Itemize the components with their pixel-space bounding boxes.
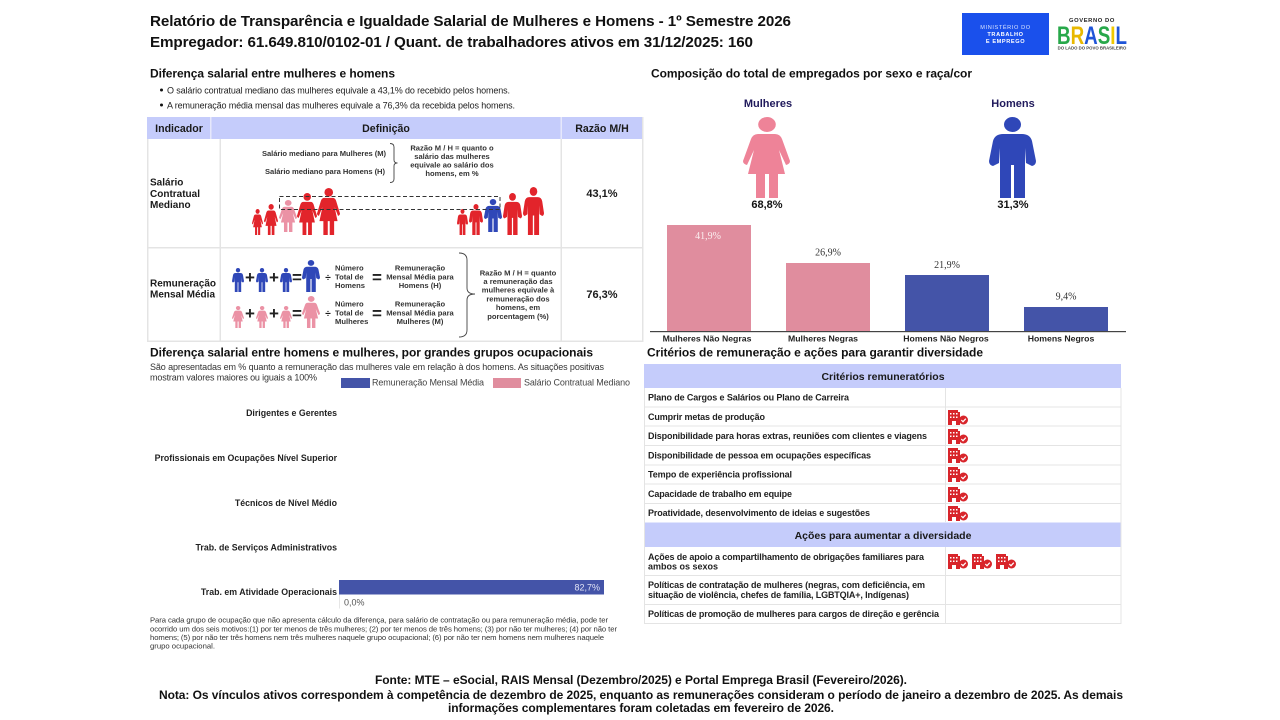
heading: grupos ocupacionais: Diferença salarial entre homens e mulheres, por grandes grupos ocupacionais <box>150 346 593 360</box>
row: remuneração mensal média: mulheres equivale à <box>482 286 555 294</box>
formula: homens: Remuneração <box>395 264 445 272</box>
title: Empregador: 61.649.810/0102-01 / Quant. de trabalhadores ativos em 31/12/2025: 160 <box>150 34 753 51</box>
icon: homens: 31,3% <box>997 199 1029 211</box>
panel: critérios table <box>644 364 1122 624</box>
text: fonte e nota <box>159 673 1123 715</box>
heading: composição: Composição do total de empregados por sexo e raça/cor <box>651 66 972 80</box>
text: footnote: grupo ocupacional. <box>150 642 215 650</box>
bar chart: grupos ocupacionais: Trab. em Atividade Operacionais <box>201 587 337 597</box>
title: Relatório de Transparência e Igualdade Salarial de Mulheres e Homens - 1º Semestre 2026 <box>150 13 791 30</box>
row: salário contratual mediano <box>150 144 618 211</box>
panel: indicator table <box>147 117 644 342</box>
rows: critérios: Disponibilidade de pessoa em ocupações específicas <box>648 450 871 460</box>
bullets: key findings <box>160 86 515 110</box>
formula: homens: + <box>245 268 255 287</box>
bar chart: sexo e raça/cor: 26,9% <box>815 248 841 258</box>
formula: mulheres <box>232 296 455 328</box>
heading: critérios: Critérios de remuneração e ações para garantir diversidade <box>647 346 983 360</box>
table header: Indicador <box>155 123 203 135</box>
bar chart: sexo e raça/cor <box>650 225 1126 344</box>
table header: Definição <box>362 123 410 135</box>
row: remuneração mensal média: remuneração dos <box>486 294 550 304</box>
formula: homens: Total de <box>335 272 364 282</box>
header: ações para aumentar a diversidade: Ações para aumentar a diversidade <box>795 530 972 542</box>
formula: homens: = <box>292 268 302 287</box>
row: salário contratual mediano: Razão M / H = quanto o <box>410 144 494 152</box>
bar chart: grupos ocupacionais: 82,7% <box>574 582 600 592</box>
formula: mulheres: Total de <box>335 308 364 318</box>
formula: mulheres: + <box>269 304 279 323</box>
row: salário contratual mediano: equivale ao salário dos <box>410 160 494 170</box>
logo: Ministério do Trabalho e Emprego: TRABALHO <box>987 32 1024 38</box>
row: salário contratual mediano: 43,1% <box>586 188 618 200</box>
icon: mulheres: Mulheres <box>744 98 792 110</box>
formula: mulheres: Mensal Média para <box>386 308 455 318</box>
row: salário contratual mediano: Salário <box>150 178 183 188</box>
formula: homens: Homens <box>335 281 365 290</box>
formula: homens: Número <box>335 264 364 272</box>
bar chart: sexo e raça/cor: Homens Não Negros <box>903 334 989 344</box>
legend: Remuneração Mensal Média <box>372 378 484 388</box>
rows: ações: situação de violência, chefes de família, LGBTQIA+, Indígenas) <box>648 590 909 600</box>
row: remuneração mensal média: Mensal Média <box>150 290 215 300</box>
bar chart: grupos ocupacionais: 0,0% <box>344 598 365 608</box>
icon: homens: Homens <box>991 98 1035 110</box>
rows: critérios: Capacidade de trabalho em equipe <box>648 489 792 499</box>
row: salário contratual mediano: Salário mediano para Mulheres (M) <box>262 149 386 158</box>
logo: Governo do Brasil: DO LADO DO POVO BRASILEIRO <box>1058 46 1127 50</box>
heading: diferença salarial: Diferença salarial entre mulheres e homens <box>150 66 395 80</box>
icons: mediana figures <box>252 187 544 235</box>
rows: critérios: Proatividade, desenvolvimento de ideias e sugestões <box>648 508 870 518</box>
formula: mulheres: Remuneração <box>395 300 445 308</box>
text: fonte e nota: informações complementares foram coletadas em fevereiro de 2026. <box>448 701 834 715</box>
text: footnote: homens; (5) por não ter três homens nem três mulheres naquele grupo ocupacional; (6) por não ter nem homens nem mulheres naquele <box>150 633 604 642</box>
text: footnote <box>150 616 617 650</box>
formula: homens: Homens (H) <box>399 281 442 290</box>
rows: ações: Políticas de promoção de mulheres para cargos de direção e gerência <box>648 609 940 619</box>
row: salário contratual mediano: Mediano <box>150 200 191 211</box>
formula: mulheres: + <box>245 304 255 323</box>
rows: ações: ambos os sexos <box>648 562 718 572</box>
logo: Ministério do Trabalho e Emprego: E EMPREGO <box>986 39 1025 45</box>
formula: homens: + <box>269 268 279 287</box>
text: chart description <box>150 362 604 382</box>
text: footnote: ocorrido um dos seis motivos:(1) por ter menos de três mulheres; (2) por ter menos de três homens; (3) por não ter mulheres; (4) por não ter <box>150 624 617 634</box>
row: remuneração mensal média: a remuneração das <box>483 277 553 286</box>
bar chart: grupos ocupacionais: Profissionais em Ocupações Nível Superior <box>155 453 338 463</box>
row: remuneração mensal média: porcentagem (%) <box>487 312 549 321</box>
row: remuneração mensal média: Razão M / H = quanto <box>480 268 557 278</box>
bar chart: grupos ocupacionais: Dirigentes e Gerentes <box>246 408 337 418</box>
rows: critérios: Tempo de experiência profissional <box>648 470 792 480</box>
icon: homens <box>989 98 1036 211</box>
rows: ações: Políticas de contratação de mulheres (negras, com deficiência, em <box>648 580 925 590</box>
rows: ações <box>648 552 940 619</box>
header: critérios remuneratórios: Critérios remuneratórios <box>821 371 945 383</box>
logo: Ministério do Trabalho e Emprego <box>962 13 1049 55</box>
icon: mulheres <box>743 98 792 211</box>
bar chart: sexo e raça/cor: Mulheres Negras <box>788 334 858 344</box>
bullets: key findings: O salário contratual mediano das mulheres equivale a 43,1% do recebido pelos homens. <box>167 86 510 96</box>
icons: critérios adotados <box>948 410 968 521</box>
text: fonte e nota: Nota: Os vínculos ativos correspondem à competência de dezembro de 2025, enquanto as remunerações consideram o período de janeiro a dezembro de 2025. As demais <box>159 688 1123 702</box>
rows: critérios: Disponibilidade para horas extras, reuniões com clientes e viagens <box>648 431 927 441</box>
row: remuneração mensal média: 76,3% <box>586 289 618 301</box>
legend <box>341 378 630 388</box>
logo: Governo do Brasil: GOVERNO DO <box>1069 18 1115 24</box>
icon: mulheres: 68,8% <box>751 199 783 211</box>
formula: homens: Mensal Média para <box>386 272 455 282</box>
logo: Ministério do Trabalho e Emprego: MINISTÉRIO DO <box>980 24 1031 31</box>
formula: mulheres: Mulheres <box>335 317 368 326</box>
formula: homens: = <box>372 268 382 287</box>
header: critérios remuneratórios <box>644 364 1121 388</box>
bar chart: sexo e raça/cor: 9,4% <box>1056 292 1076 302</box>
formula: homens: ÷ <box>325 273 331 284</box>
row: remuneração mensal média: Remuneração <box>150 278 216 290</box>
rows: critérios: Cumprir metas de produção <box>648 412 766 422</box>
header: ações para aumentar a diversidade <box>644 522 1121 547</box>
rows: critérios: Plano de Cargos e Salários ou Plano de Carreira <box>648 392 850 402</box>
bullets: key findings: A remuneração média mensal das mulheres equivale a 76,3% da recebida pelos homens. <box>167 100 515 110</box>
row: remuneração mensal média: homens, em <box>496 303 540 312</box>
bar chart: grupos ocupacionais: Trab. de Serviços Administrativos <box>196 542 337 552</box>
title <box>150 13 791 51</box>
legend: Salário Contratual Mediano <box>524 378 630 388</box>
bar chart: sexo e raça/cor: Homens Negros <box>1028 334 1094 344</box>
bar chart: grupos ocupacionais: Técnicos de Nível Médio <box>235 498 338 508</box>
formula: homens <box>232 260 455 292</box>
rows: ações: Ações de apoio a compartilhamento de obrigações familiares para <box>648 552 925 562</box>
formula: mulheres: ÷ <box>325 309 331 320</box>
text: chart description: mostram valores maiores ou iguais a 100% <box>150 372 317 382</box>
rows: critérios <box>648 392 927 518</box>
row: salário contratual mediano: Contratual <box>150 189 200 200</box>
formula: mulheres: Mulheres (M) <box>397 317 444 326</box>
bar chart: grupos ocupacionais <box>155 408 604 608</box>
icons: ações adotadas <box>948 554 1016 569</box>
table header: Razão M/H <box>575 123 629 135</box>
bar chart: sexo e raça/cor: 21,9% <box>934 260 960 271</box>
formula: mulheres: = <box>372 304 382 323</box>
formula: mulheres: = <box>292 304 302 323</box>
logo: Governo do Brasil: BRASIL <box>1057 22 1127 50</box>
bar chart: sexo e raça/cor: 41,9% <box>695 231 721 242</box>
row: salário contratual mediano: homens, em % <box>425 169 479 178</box>
table header <box>147 117 643 139</box>
bar chart: sexo e raça/cor: Mulheres Não Negras <box>663 334 752 344</box>
text: chart description: São apresentadas em % quanto a remuneração das mulheres vale em relação à dos homens. As situações positivas <box>150 362 604 372</box>
row: remuneração mensal média <box>150 253 618 337</box>
text: footnote: Para cada grupo de ocupação que não apresenta cálculo da diferença, para salário de contratação ou para remuneração média, pode ter <box>150 616 608 624</box>
row: salário contratual mediano: salário das mulheres <box>414 152 490 161</box>
text: fonte e nota: Fonte: MTE – eSocial, RAIS Mensal (Dezembro/2025) e Portal Emprega Brasil (Fevereiro/2026). <box>375 673 907 687</box>
row: salário contratual mediano: Salário mediano para Homens (H) <box>265 167 385 176</box>
formula: mulheres: Número <box>335 300 364 308</box>
